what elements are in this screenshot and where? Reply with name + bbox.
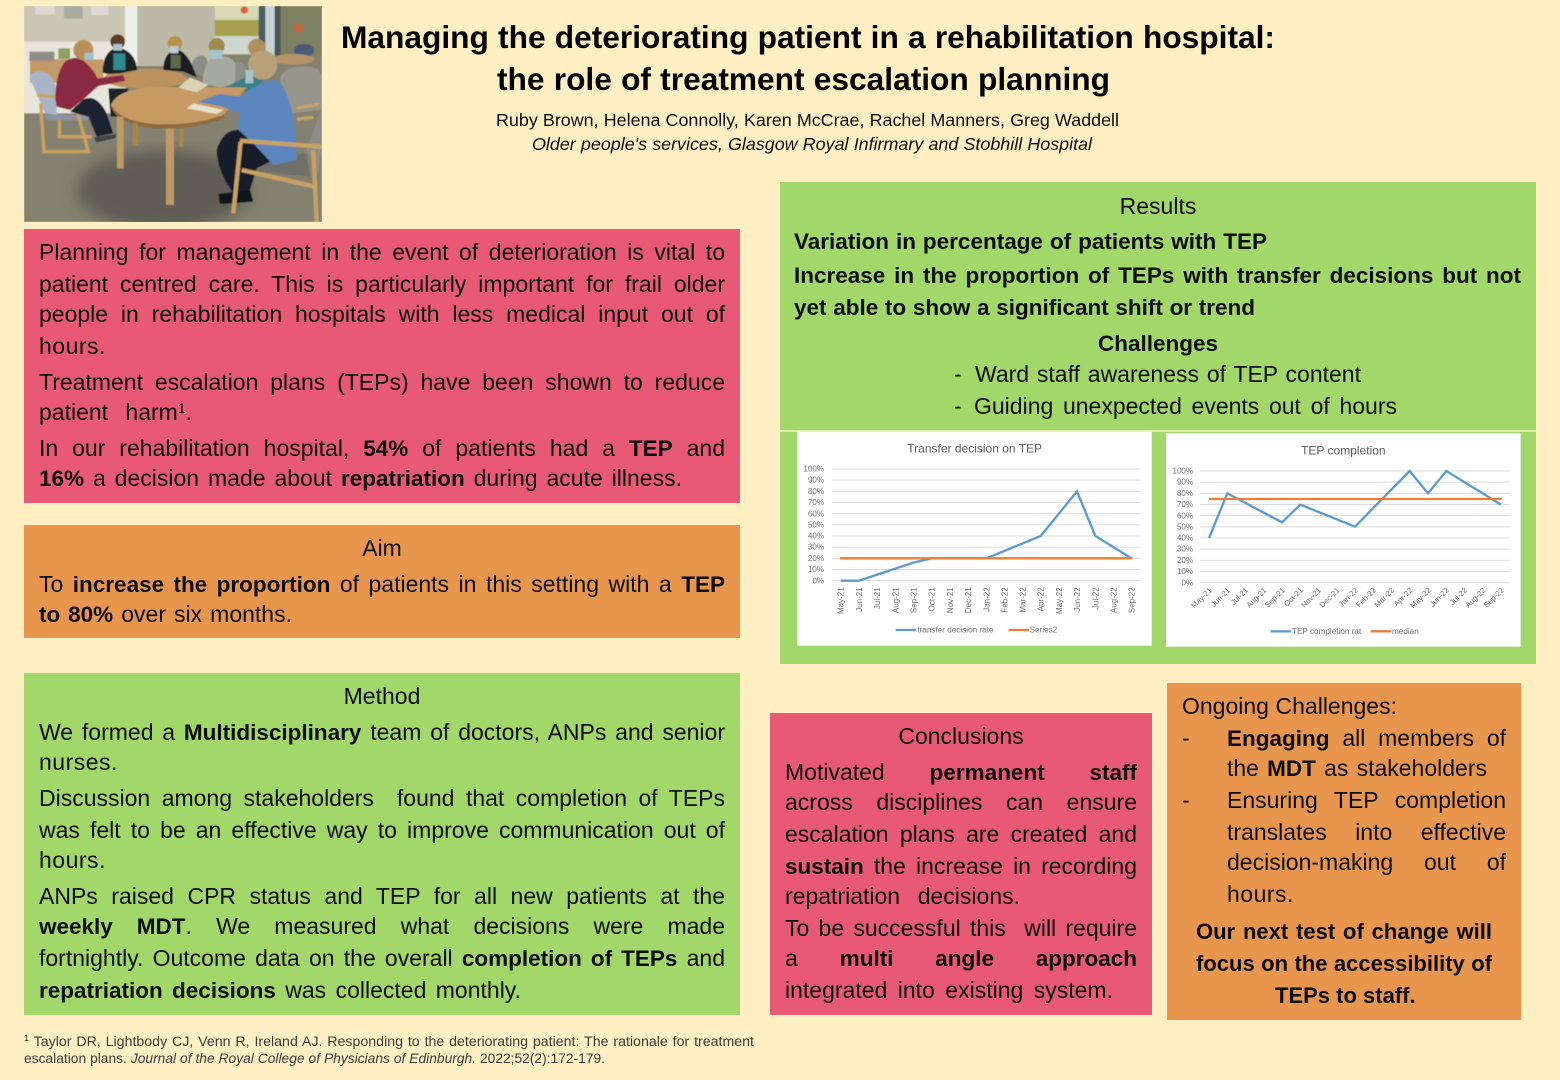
chart: transfer decision on TEP: Sep-21 [909,587,918,613]
chart: transfer decision on TEP: Dec-21 [964,587,973,613]
footnote: reference [24,1033,754,1066]
text: method paragraph 1: nurses. [39,749,118,775]
chart: TEP completion: Aug-21 [1245,586,1268,610]
text: method paragraph 2: was felt to be an effective way to improve communication out of [39,817,725,843]
text: method paragraph 1 [39,719,725,775]
list: ongoing challenge 2: translates into effective [1227,819,1506,845]
text: background paragraph 1: patient centred care. This is particularly important for frail older [39,271,725,297]
chart: TEP completion: Aug-22 [1464,586,1487,610]
seated person left [30,72,57,115]
seated person foreground [307,107,322,173]
chart: TEP completion: TEP completion [1301,443,1386,457]
chart: transfer decision on TEP: 40% [808,532,824,541]
chart: transfer decision on TEP: May-22 [1055,587,1064,614]
chart: transfer decision on TEP: Transfer decision on TEP [907,441,1042,455]
text: method paragraph 3: fortnightly. Outcome data on the overall completion of TEPs and [39,945,725,971]
chart: transfer decision on TEP: Jun-22 [1073,587,1082,612]
chart: transfer decision on TEP: Jul-22 [1091,587,1100,609]
text: background paragraph 2: Treatment escalation plans (TEPs) have been shown to reduce [39,369,725,395]
text: background paragraph 2: patient harm1. [39,399,192,425]
affiliation: Older people's services, Glasgow Royal Infirmary and Stobhill Hospital [532,134,1092,154]
text: background paragraph 2 [39,369,725,425]
text: background paragraph 3: In our rehabilitation hospital, 54% of patients had a TEP and [39,435,725,461]
text: conclusions paragraph 1: Motivated permanent staff [785,759,1137,785]
seated person back 2 [163,49,197,77]
photo: team meeting around tables [24,6,322,222]
chart: TEP completion: 60% [1177,511,1193,520]
text: method paragraph 3: weekly MDT. We measured what decisions were made [39,913,725,939]
text: results findings: Variation in percentage of patients with TEP [794,229,1267,254]
seated person back 1 [103,47,137,74]
chart: TEP completion: Feb-22 [1354,586,1378,609]
heading: results: Results [1120,193,1196,219]
chart: TEP completion: 100% [1173,467,1193,476]
chart: transfer decision on TEP: 30% [808,543,824,552]
list: ongoing challenge 2: Ensuring TEP completion [1227,787,1506,813]
text: aim statement: to 80% over six months. [39,601,292,627]
list: ongoing challenge 2 [1182,787,1506,907]
text: method paragraph 2: hours. [39,847,106,873]
chart: transfer decision on TEP: 20% [808,554,824,563]
chart: transfer decision on TEP: Aug-21 [891,587,900,613]
chart: transfer decision on TEP: Jul-21 [873,587,882,609]
text: background paragraph 1 [39,239,726,359]
chart: transfer decision on TEP: Feb-22 [1000,587,1009,613]
text: background paragraph 3 [39,435,725,491]
panel: ongoing challenges [1167,683,1521,1020]
footnote: reference: 1 Taylor DR, Lightbody CJ, Venn R, Ireland AJ. Responding to the deteriorating patient: The rationale for treatment [24,1033,754,1050]
heading: conclusions: Conclusions [898,723,1024,749]
text: next test of change: Our next test of change will [1196,919,1492,944]
title: the role of treatment escalation planning [497,61,1110,97]
chart: TEP completion: 50% [1177,522,1193,531]
chart: transfer decision on TEP: Nov-21 [946,587,955,613]
list: ongoing challenge 2: - [1182,787,1190,813]
text: method paragraph 3: repatriation decisions was collected monthly. [39,977,521,1003]
chart: transfer decision on TEP: 60% [808,509,824,518]
seated person right 2 [217,60,277,96]
chart: TEP completion: median [1392,627,1419,636]
text: next test of change: focus on the accessibility of [1196,951,1492,976]
chart: TEP completion: Jun-21 [1209,586,1232,609]
text: background paragraph 1: people in rehabilitation hospitals with less medical input out of [39,301,725,327]
text: conclusions paragraph 1: repatriation decisions. [785,883,1020,909]
chart: transfer decision on TEP: Mar-22 [1019,587,1028,613]
chart: TEP completion: 0% [1181,578,1193,587]
chart: transfer decision on TEP: Apr-22 [1037,587,1046,611]
chart: transfer decision on TEP: Aug-22 [1109,587,1118,613]
chart: TEP completion: 80% [1177,489,1193,498]
chart: TEP completion: Jun-22 [1428,586,1451,609]
chart: transfer decision on TEP: Jan-22 [982,587,991,612]
chart: TEP completion: May-22 [1408,586,1433,610]
chart: transfer decision on TEP: 70% [808,498,824,507]
text: next test of change [1196,919,1492,1008]
list: challenges [954,361,1397,419]
text: conclusions paragraph 1: escalation plans are created and [785,821,1137,847]
text: aim statement [39,571,725,627]
text: conclusions paragraph 1: across disciplines can ensure [785,789,1137,815]
heading: challenges: Challenges [1098,331,1218,356]
panel: conclusions [770,713,1152,1015]
panel: aim [24,525,740,638]
seated person right 1 [203,56,236,87]
panel: method [24,673,740,1015]
chart: TEP completion: 90% [1177,478,1193,487]
chart: TEP completion: Sep-22 [1482,586,1506,610]
text: conclusions paragraph 2: To be successful this will require [785,915,1137,941]
front table [111,87,247,126]
text: conclusions paragraph 2: integrated into existing system. [785,977,1113,1003]
chart: transfer decision on TEP: May-21 [837,587,846,614]
text: next test of change: TEPs to staff. [1275,983,1416,1008]
title [341,19,1275,97]
chart: TEP completion: Jul-21 [1229,586,1250,607]
chart: transfer decision on TEP: Sep-22 [1128,587,1137,613]
text: conclusions paragraph 2 [785,915,1137,1003]
list: ongoing challenge 2: hours. [1227,881,1294,907]
text: method paragraph 2 [39,785,726,873]
list: ongoing challenge 1: - [1182,725,1190,751]
chart: TEP completion: Jan-22 [1337,586,1360,609]
chart: TEP completion: Oct-21 [1282,586,1305,608]
list: ongoing challenge 1: the MDT as stakeholders [1227,755,1487,781]
text: conclusions paragraph 1 [785,759,1138,909]
chart: TEP completion: 30% [1177,545,1193,554]
text: results findings [794,229,1521,320]
chart: TEP completion: Mar-22 [1373,586,1396,609]
text: conclusions paragraph 1: sustain the increase in recording [785,853,1137,879]
chart: TEP completion: TEP completion rat [1292,627,1362,636]
chart: TEP completion: 10% [1177,567,1193,576]
chart: TEP completion: Apr-22 [1392,586,1414,608]
list: challenges: - [954,361,962,387]
chart: transfer decision on TEP: 90% [808,476,824,485]
panel: background [24,229,740,503]
text: method paragraph 3 [39,883,725,1003]
chart: TEP completion: 70% [1177,500,1193,509]
heading: ongoing challenges: Ongoing Challenges: [1182,693,1397,719]
list: ongoing challenge 1 [1182,725,1506,781]
chart: transfer decision on TEP: Oct-21 [928,587,937,611]
chart: TEP completion: Nov-21 [1299,586,1323,610]
chart: TEP completion [1166,433,1521,647]
text: method paragraph 1: We formed a Multidisciplinary team of doctors, ANPs and senior [39,719,725,745]
list: challenges: - [954,393,962,419]
text: background paragraph 3: 16% a decision made about repatriation during acute illness. [39,465,682,491]
title: Managing the deteriorating patient in a rehabilitation hospital: [341,19,1275,55]
heading: method: Method [344,683,420,709]
chart: transfer decision on TEP: Jun-21 [855,587,864,612]
list: challenges: Guiding unexpected events out of hours [974,393,1397,419]
chart: transfer decision on TEP: 10% [808,565,824,574]
text: conclusions paragraph 2: a multi angle approach [785,945,1137,971]
panel: results [780,182,1536,664]
list: challenges: Ward staff awareness of TEP content [975,361,1361,387]
chart: TEP completion: 20% [1177,556,1193,565]
text: results findings: Increase in the proportion of TEPs with transfer decisions but not [794,263,1521,288]
chart: transfer decision on TEP: 50% [808,520,824,529]
list: ongoing challenge 1: Engaging all members of [1227,725,1506,751]
text: aim statement: To increase the proportion of patients in this setting with a TEP [39,571,725,597]
chart: TEP completion: Sep-21 [1263,586,1287,610]
text: background paragraph 1: Planning for management in the event of deterioration is vital to [39,239,725,265]
authors: Ruby Brown, Helena Connolly, Karen McCrae, Rachel Manners, Greg Waddell [496,110,1119,130]
chart: transfer decision on TEP: 80% [808,487,824,496]
chart: TEP completion: Jul-22 [1448,586,1469,607]
text: background paragraph 1: hours. [39,333,106,359]
text: results findings: yet able to show a significant shift or trend [794,295,1255,320]
chart: transfer decision on TEP: 100% [804,465,824,474]
chart: TEP completion: 40% [1177,534,1193,543]
text: method paragraph 3: ANPs raised CPR status and TEP for all new patients at the [39,883,725,909]
text: method paragraph 2: Discussion among stakeholders found that completion of TEPs [39,785,725,811]
list: ongoing challenge 2: decision-making out of [1227,849,1506,875]
chart: TEP completion: Dec-21 [1318,586,1341,610]
back table [103,69,187,89]
footnote: reference: escalation plans. Journal of the Royal College of Physicians of Edinburgh. 2022;52(2):172-179. [24,1051,605,1066]
chart: transfer decision on TEP: Series2 [1030,626,1058,635]
heading: aim: Aim [362,535,402,561]
chart: transfer decision on TEP [797,432,1152,646]
chart: transfer decision on TEP: transfer decision rate [917,626,994,635]
chart: TEP completion: May-21 [1189,586,1214,610]
chart: transfer decision on TEP: 0% [812,576,824,585]
